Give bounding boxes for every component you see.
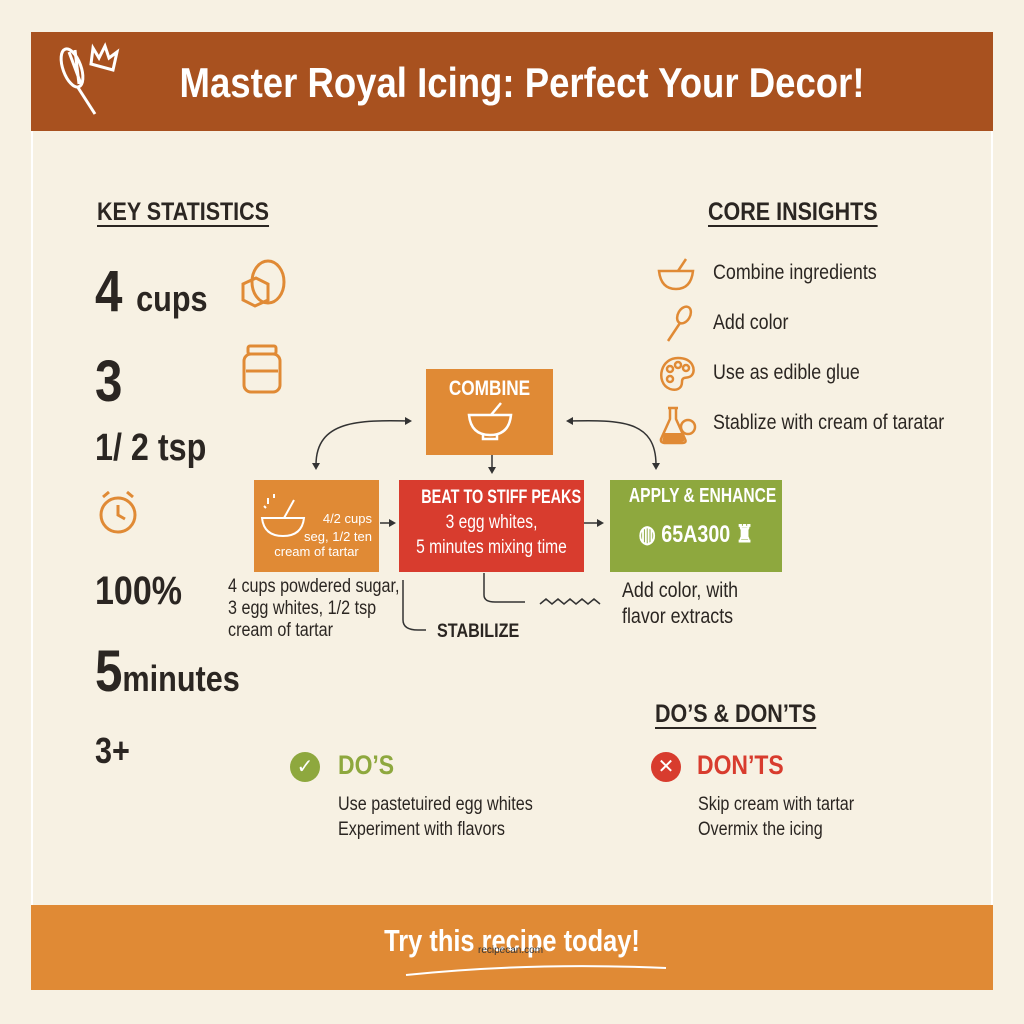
call to action: Try this recipe today! bbox=[384, 923, 640, 958]
footer banner: recipecan.com bbox=[478, 945, 543, 956]
panel: don'ts: Overmix the icing bbox=[698, 819, 823, 840]
icon: clock bbox=[100, 490, 136, 534]
box: apply & enhance: APPLY & ENHANCE bbox=[629, 485, 776, 507]
box: ingredients: cream of tartar bbox=[274, 544, 359, 559]
icon: cross: ✕ bbox=[658, 756, 674, 778]
box: ingredients bbox=[254, 480, 379, 572]
panel: do's: Use pastetuired egg whites bbox=[338, 794, 533, 815]
insight 1: Combine ingredients bbox=[713, 261, 877, 284]
box: beat to stiff peaks: 3 egg whites, bbox=[446, 512, 537, 533]
panel: don'ts: Skip cream with tartar bbox=[698, 794, 854, 815]
insight 3: Use as edible glue bbox=[713, 361, 860, 384]
stat: 5 minutes: 5minutes bbox=[95, 639, 240, 704]
text: add color: flavor extracts bbox=[622, 605, 733, 628]
insight 3 bbox=[660, 356, 860, 391]
insights list bbox=[658, 258, 944, 444]
stat: 1/2 tsp: 1/ 2 tsp bbox=[95, 427, 206, 469]
text: add color: Add color, with bbox=[622, 579, 738, 602]
stat: 3: 3 bbox=[95, 349, 122, 414]
text: add color bbox=[622, 579, 738, 628]
panel: do's bbox=[290, 750, 533, 840]
text: ingredients note: 3 egg whites, 1/2 tsp bbox=[228, 598, 376, 619]
panel: do's: DO’S bbox=[338, 750, 394, 780]
box: combine bbox=[426, 369, 553, 455]
title: Master Royal Icing: Perfect Your Decor! bbox=[180, 59, 864, 106]
box: beat to stiff peaks: BEAT TO STIFF PEAKS bbox=[421, 487, 581, 508]
box: combine: COMBINE bbox=[449, 377, 530, 400]
stat: 4 cups: 4 cups bbox=[95, 259, 208, 324]
insight 2: Add color bbox=[713, 311, 788, 334]
stats column bbox=[95, 259, 240, 771]
box: ingredients: 4/2 cups bbox=[323, 511, 372, 526]
box: apply & enhance bbox=[610, 480, 782, 572]
panel: don'ts: DON’TS bbox=[697, 750, 784, 780]
insight 1 bbox=[658, 258, 877, 290]
text: ingredients note: cream of tartar bbox=[228, 620, 333, 641]
panel: do's: Experiment with flavors bbox=[338, 819, 505, 840]
text: ingredients note bbox=[228, 576, 399, 641]
insight 2 bbox=[667, 305, 788, 342]
heading: key statistics: KEY STATISTICS bbox=[97, 198, 269, 226]
insight 4 bbox=[660, 406, 944, 444]
stat: 3+: 3+ bbox=[95, 730, 130, 771]
text: ingredients note: 4 cups powdered sugar, bbox=[228, 576, 399, 597]
heading: do's & don'ts: DO’S & DON’TS bbox=[655, 700, 816, 728]
icon: check bbox=[290, 752, 320, 782]
label: stabilize: STABILIZE bbox=[437, 621, 519, 642]
heading: core insights: CORE INSIGHTS bbox=[708, 198, 878, 226]
icon: cross bbox=[651, 752, 681, 782]
icon: check: ✓ bbox=[297, 756, 313, 778]
stat: 100%: 100% bbox=[95, 569, 182, 613]
header banner bbox=[31, 32, 993, 131]
box: ingredients: seg, 1/2 ten bbox=[304, 529, 372, 544]
box: beat to stiff peaks bbox=[399, 480, 584, 572]
icon: whisk and crown bbox=[60, 42, 120, 115]
footer banner bbox=[31, 905, 993, 990]
icon: jar bbox=[242, 344, 282, 394]
box: beat to stiff peaks: 5 minutes mixing time bbox=[416, 537, 567, 558]
insight 4: Stablize with cream of taratar bbox=[713, 411, 944, 434]
icon: sugar cube and egg bbox=[242, 260, 286, 308]
box: apply & enhance: ◍ 65A300 ♜ bbox=[639, 521, 753, 548]
panel: don'ts bbox=[651, 750, 854, 840]
